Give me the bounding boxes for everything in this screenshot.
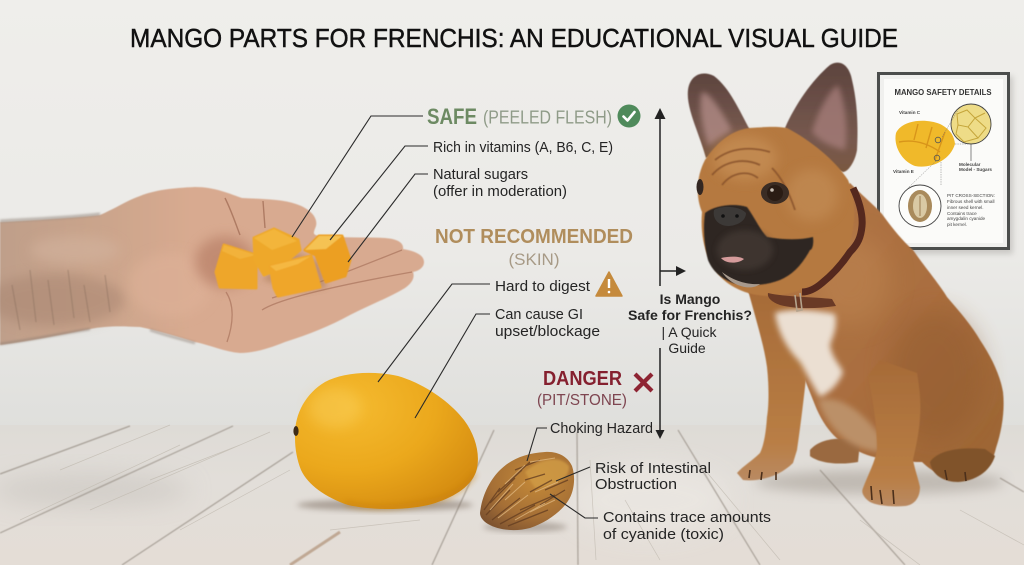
eye left — [696, 179, 704, 195]
section: danger pit stone — [537, 367, 771, 543]
poster connector lines — [908, 110, 970, 188]
poster heading: MANGO SAFETY DETAILS — [894, 87, 992, 97]
skin upset leader — [415, 314, 490, 418]
back paw far — [810, 439, 860, 464]
hind foot — [930, 448, 995, 482]
french bulldog — [688, 63, 1005, 506]
obstruction leader — [556, 467, 590, 481]
poster small labels: amygdalin cyanide — [947, 216, 985, 221]
icon: red cross — [635, 374, 652, 391]
poster small labels: Molecular — [959, 162, 981, 167]
poster small labels: Contains trace — [947, 211, 977, 216]
danger fact: cyanide — [603, 510, 771, 543]
danger subheading: (PIT/STONE) — [537, 392, 627, 409]
icon: check mark — [618, 104, 640, 128]
safe fact: sugars — [433, 166, 567, 200]
background: wall — [0, 0, 1024, 428]
danger fact: obstruction: Risk of Intestinal — [595, 461, 711, 477]
skin fact: digest: Hard to digest — [495, 278, 591, 295]
safe leader — [292, 116, 423, 237]
hand holding mango cubes — [0, 187, 424, 353]
safe fact: vitamins: Rich in vitamins (A, B6, C, E) — [433, 139, 613, 156]
skin fact: upset — [495, 306, 600, 340]
chin — [722, 272, 760, 287]
central question text: Guide — [668, 340, 706, 356]
danger fact: cyanide: of cyanide (toxic) — [603, 527, 724, 543]
poster small labels: Vitamin C — [899, 110, 921, 115]
mango cubes — [216, 229, 350, 296]
right front leg — [862, 360, 920, 506]
belly — [818, 399, 880, 452]
cyanide leader — [550, 494, 598, 518]
cube 4 — [305, 236, 350, 282]
safe subheading: (PEELED FLESH) — [483, 108, 612, 128]
mango fruit — [293, 373, 478, 511]
background: wooden floor — [0, 425, 1024, 565]
arrow up — [654, 108, 666, 286]
skin fact: upset: upset/blockage — [495, 323, 600, 340]
central question text — [628, 291, 752, 356]
danger fact: obstruction — [595, 461, 711, 493]
skin fact: upset: Can cause GI — [495, 306, 583, 323]
cube 3 — [270, 256, 320, 296]
right ear — [785, 63, 857, 172]
mango pit — [480, 452, 574, 532]
nose — [714, 207, 746, 226]
cube 1 — [216, 245, 256, 288]
cube 2 — [254, 229, 300, 275]
leader lines — [292, 116, 598, 518]
head — [698, 127, 854, 296]
forehead wrinkles — [712, 149, 795, 210]
danger fact: cyanide: Contains trace amounts — [603, 510, 771, 526]
poster cell detail circle — [951, 104, 991, 161]
poster mango illustration — [895, 121, 955, 167]
central question text: | A Quick — [662, 324, 717, 340]
poster small labels: Fibrous shell with small — [947, 199, 994, 204]
vitamins leader — [330, 146, 428, 240]
skin subheading: (SKIN) — [508, 250, 560, 269]
title: MANGO PARTS FOR FRENCHIS: AN EDUCATIONAL VISUAL GUIDE — [130, 25, 898, 53]
skin digest leader — [378, 284, 490, 382]
danger fact: choking: Choking Hazard — [550, 421, 653, 437]
poster pit cross-section circle — [899, 185, 941, 227]
arrow down — [656, 348, 664, 439]
central question text: Safe for Frenchis? — [628, 307, 752, 323]
body — [748, 183, 1004, 479]
muzzle — [704, 205, 813, 285]
left ear — [688, 74, 750, 158]
central question text: Is Mango — [660, 291, 720, 307]
framed poster: mango safety details — [877, 72, 1013, 254]
danger fact: obstruction: Obstruction — [595, 477, 677, 493]
choking leader — [527, 428, 547, 461]
safe fact: sugars: (offer in moderation) — [433, 183, 567, 200]
section: safe peeled flesh — [427, 104, 640, 200]
arm and hand — [0, 187, 424, 353]
central arrows — [654, 108, 686, 439]
eye right — [761, 182, 789, 204]
poster small labels: inner seed kernel. — [947, 205, 984, 210]
safe fact: sugars: Natural sugars — [433, 166, 528, 183]
poster small labels: Model - Sugars — [959, 167, 992, 172]
floor shadow — [755, 470, 1005, 494]
tongue — [721, 257, 744, 263]
icon: warning triangle — [596, 272, 622, 296]
arrow right — [660, 266, 686, 276]
left front leg — [737, 290, 808, 480]
collar — [768, 188, 862, 311]
poster small labels: pit kernel. — [947, 222, 967, 227]
white chest — [775, 310, 843, 397]
poster small labels: Vitamin E — [893, 169, 914, 174]
section: not recommended skin — [435, 226, 633, 340]
poster small labels — [893, 110, 995, 227]
not recommended heading: NOT RECOMMENDED — [435, 226, 633, 248]
natural sugars leader — [348, 174, 428, 262]
danger heading: DANGER — [543, 367, 622, 390]
poster small labels: PIT CROSS-SECTION: — [947, 193, 995, 198]
safe heading: SAFE — [427, 104, 477, 129]
